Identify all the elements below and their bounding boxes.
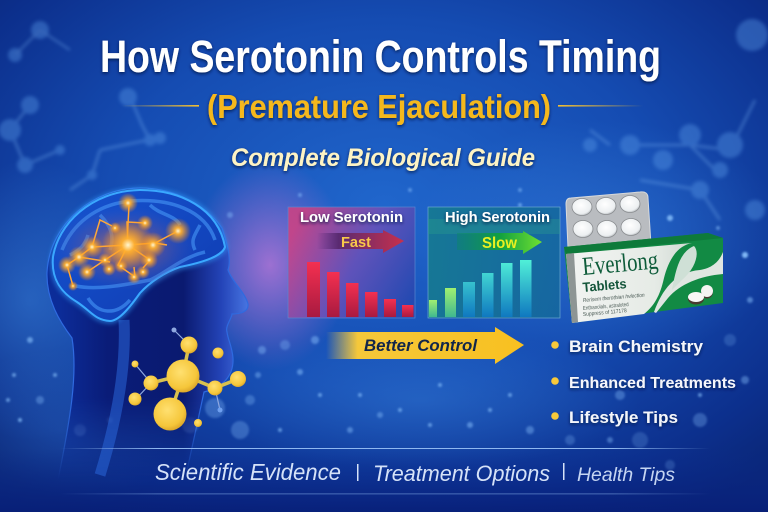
bullet list: [551, 337, 736, 427]
box small print: Rerisem therothian hvlection: [583, 293, 645, 304]
blister pack: [566, 192, 651, 254]
footer: divider: [563, 463, 564, 480]
bullet: brain chemistry: Brain Chemistry: [569, 337, 704, 356]
molecule icon: [128, 328, 246, 430]
head profile: [47, 188, 248, 480]
bullet: enhanced treatments: Enhanced Treatments: [569, 375, 736, 392]
bar chart: rising teal bars: [429, 260, 532, 317]
footer: divider: [357, 464, 358, 481]
head silhouette illustration: [47, 188, 248, 480]
arrow: fast: Fast: [341, 234, 371, 251]
title: How Serotonin Controls Timing: [100, 31, 661, 82]
brain: [53, 190, 225, 321]
medicine box: everlong tablets: [564, 233, 723, 323]
high serotonin heading: High Serotonin: [445, 210, 550, 226]
arrow: better control: Better Control: [364, 336, 478, 355]
low serotonin heading: Low Serotonin: [300, 210, 403, 226]
spinal cord: [100, 320, 124, 475]
product type: Tablets: [582, 276, 627, 295]
box small print: Suppress of 117178: [583, 308, 627, 318]
panel: high serotonin: [428, 207, 560, 318]
arrow: better control: [326, 327, 524, 364]
subtitle with rules: (Premature Ejaculation): [207, 88, 551, 125]
neural network: [67, 205, 178, 286]
panel: low serotonin: [288, 207, 415, 318]
tagline: Complete Biological Guide: [231, 144, 535, 172]
footer: scientific evidence: Scientific Evidence: [155, 459, 341, 485]
bar chart: falling red bars: [307, 262, 414, 317]
footer band: [60, 448, 710, 494]
footer: health tips: Health Tips: [577, 464, 675, 486]
background molecules: [0, 19, 768, 220]
footer: treatment options: Treatment Options: [373, 461, 550, 486]
brand name: Everlong: [581, 245, 659, 281]
box tablets: [688, 285, 713, 304]
bokeh particles: [6, 188, 753, 470]
box small print: Enthanolals, astraloted: [583, 302, 629, 312]
box small print: [583, 293, 645, 318]
arrow: slow: Slow: [482, 235, 518, 252]
bullet: lifestyle tips: Lifestyle Tips: [569, 408, 678, 427]
